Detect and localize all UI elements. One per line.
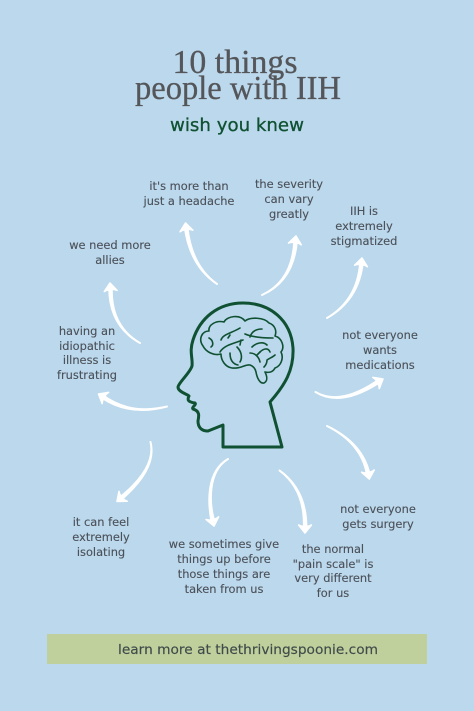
arrow: to isolating bbox=[113, 442, 152, 506]
text: severity bbox=[255, 177, 323, 221]
arrow: to stigmatized bbox=[327, 257, 368, 318]
text: more than a headache: it's more than bbox=[149, 179, 229, 193]
text: idiopathic: idiopathic bbox=[59, 339, 115, 353]
text: allies: we need more bbox=[69, 238, 151, 252]
text: idiopathic: frustrating bbox=[57, 368, 117, 382]
arrow: to more than a headache bbox=[179, 222, 217, 284]
text: allies: allies bbox=[95, 253, 125, 267]
title: people with IIH bbox=[135, 70, 341, 107]
brain bbox=[201, 317, 283, 383]
text: giving things up: taken from us bbox=[185, 582, 263, 596]
text: severity: the severity bbox=[255, 177, 323, 191]
text: giving things up bbox=[169, 537, 279, 596]
text: allies bbox=[69, 238, 151, 267]
arrow: to pain scale bbox=[280, 470, 311, 533]
title bbox=[135, 44, 341, 107]
text: surgery bbox=[340, 502, 416, 531]
text: giving things up: those things are bbox=[178, 567, 270, 581]
text: giving things up: things up before bbox=[177, 552, 271, 566]
text: severity: greatly bbox=[269, 207, 309, 221]
text: severity: can vary bbox=[264, 192, 314, 206]
text: stigmatized: IIH is bbox=[350, 204, 378, 218]
text: isolating: it can feel bbox=[73, 515, 129, 529]
text: pain scale: for us bbox=[317, 586, 349, 600]
text: medications: wants bbox=[363, 343, 397, 357]
text: surgery: gets surgery bbox=[342, 517, 414, 531]
text: pain scale bbox=[293, 542, 373, 600]
text: idiopathic: having an bbox=[59, 324, 115, 338]
text: medications: not everyone bbox=[342, 328, 418, 342]
text: isolating: extremely bbox=[72, 530, 130, 544]
text: medications: medications bbox=[345, 358, 415, 372]
subtitle: wish you knew bbox=[170, 116, 304, 136]
head outline bbox=[178, 303, 293, 447]
arrow: to idiopathic bbox=[95, 388, 167, 410]
text: more than a headache: just a headache bbox=[143, 194, 234, 208]
footer banner bbox=[47, 634, 427, 664]
text: idiopathic bbox=[57, 324, 117, 382]
text: idiopathic: illness is bbox=[63, 353, 111, 367]
text: more than a headache bbox=[143, 179, 234, 208]
text: pain scale: very different bbox=[294, 571, 372, 585]
icon: head with brain bbox=[178, 303, 293, 447]
text: pain scale: the normal bbox=[302, 542, 364, 556]
arrow: to surgery bbox=[327, 426, 376, 480]
arrow: to medications bbox=[316, 373, 386, 398]
arrow: to giving things up bbox=[206, 459, 228, 527]
text: isolating: isolating bbox=[77, 545, 125, 559]
arrow: to severity bbox=[262, 235, 302, 295]
text: pain scale: "pain scale" is bbox=[293, 557, 373, 571]
text: surgery: not everyone bbox=[340, 502, 416, 516]
text: medications bbox=[342, 328, 418, 372]
text: stigmatized bbox=[331, 204, 397, 248]
text: stigmatized: stigmatized bbox=[331, 234, 397, 248]
arrow: to allies bbox=[104, 282, 140, 343]
title: 10 things bbox=[172, 44, 298, 81]
text: stigmatized: extremely bbox=[335, 219, 393, 233]
text: giving things up: we sometimes give bbox=[169, 537, 279, 551]
text: isolating bbox=[72, 515, 130, 559]
footer banner: learn more at thethrivingspoonie.com bbox=[118, 643, 378, 658]
